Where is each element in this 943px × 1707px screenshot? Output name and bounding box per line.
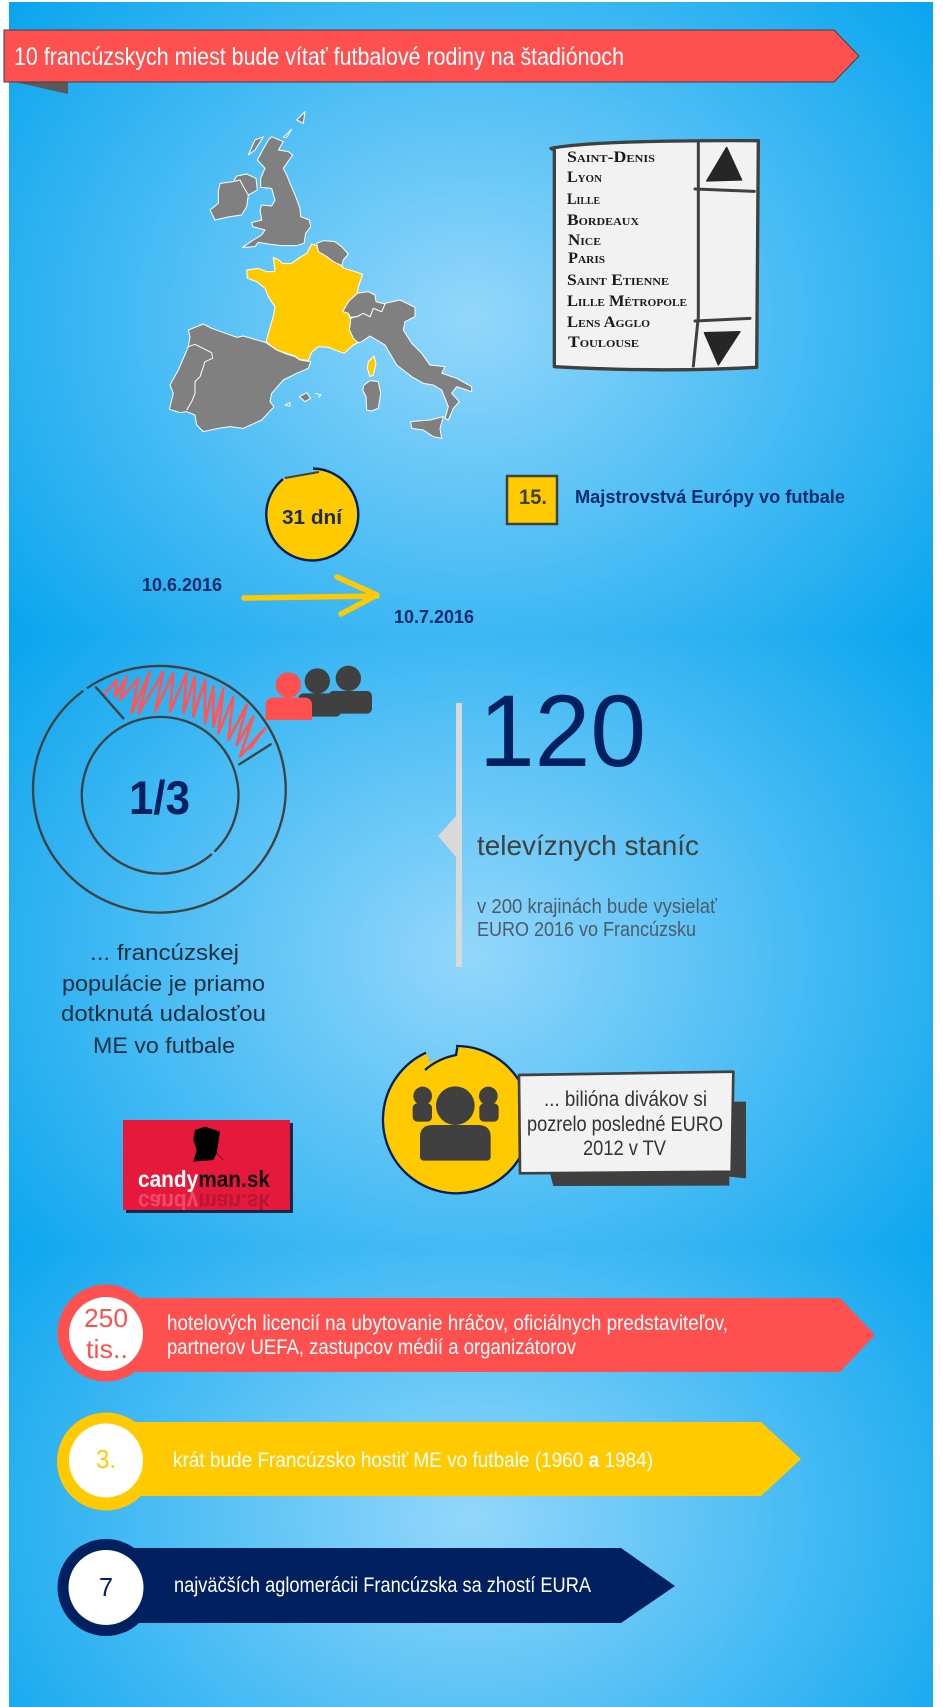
bar: hotel licences: partnerov UEFA, zastupcov médií a organizátorov <box>167 1336 576 1359</box>
viewers callout <box>519 1072 746 1186</box>
logo: candyman.sk: candyman.sk <box>138 1166 270 1192</box>
edition badge <box>507 476 557 524</box>
stat description <box>477 896 717 941</box>
text: population: ME vo futbale <box>93 1033 235 1058</box>
host city list box: Lille Métropole <box>567 293 687 310</box>
text: population: ... francúzskej <box>90 940 239 965</box>
bar: hosted three times <box>57 1412 801 1510</box>
host city list box: Saint Etienne <box>567 272 669 289</box>
bar: hosted three times: 3. <box>96 1444 116 1474</box>
text: population <box>61 940 266 1058</box>
bar: seven agglomerations: 7 <box>99 1572 113 1602</box>
bar: hotel licences: hotelových licencií na ubytovanie hráčov, oficiálnych predstaviteľov, <box>167 1312 728 1335</box>
donut chart: one third <box>33 666 286 913</box>
map of western Europe <box>169 112 472 438</box>
divider with pointer <box>438 703 462 967</box>
stat label: televíznych staníc <box>477 830 699 861</box>
bar: hotel licences: tis.. <box>86 1334 128 1364</box>
arrow: date range <box>244 577 377 614</box>
bar: hotel licences <box>58 1284 875 1382</box>
title banner <box>4 30 859 94</box>
host city list box: Lille <box>567 191 600 208</box>
stat description: v 200 krajinách bude vysielať <box>477 896 717 918</box>
edition text: Majstrovstvá Európy vo futbale <box>575 487 845 507</box>
icon: people <box>266 666 372 720</box>
bar: seven agglomerations <box>58 1539 675 1636</box>
viewers callout: ... bilióna divákov si <box>544 1088 707 1111</box>
title banner: 10 francúzskych miest bude vítať futbalové rodiny na štadiónoch <box>14 43 624 71</box>
viewers callout: pozrelo posledné EURO <box>527 1113 723 1136</box>
host city list box <box>551 141 758 370</box>
logo: candyman.sk: candyman.sk <box>138 1189 270 1215</box>
viewers circle icon <box>383 1046 531 1193</box>
stat description: EURO 2016 vo Francúzsku <box>477 919 696 941</box>
logo: candyman.sk <box>123 1120 293 1215</box>
host city list box: Lens Agglo <box>567 314 650 331</box>
end date: 10.7.2016 <box>394 607 474 627</box>
host city list box: Bordeaux <box>567 212 639 229</box>
duration circle <box>266 468 358 560</box>
panel: middle background <box>9 634 933 1254</box>
text: population: dotknutá udalosťou <box>61 1001 266 1026</box>
host city list box: Toulouse <box>568 334 639 351</box>
host city list box: Lyon <box>567 169 602 186</box>
panel: top background <box>9 2 933 634</box>
viewers callout: 2012 v TV <box>583 1137 666 1160</box>
bar: hotel licences: 250 <box>84 1303 128 1333</box>
stat: 120: 120 <box>479 674 646 788</box>
host city list box: Paris <box>568 250 605 267</box>
text: population: populácie je priamo <box>62 971 265 996</box>
panel: bottom background <box>9 1250 933 1707</box>
duration circle: 31 dní <box>282 507 343 529</box>
bar: seven agglomerations: najväčších aglomerácii Francúzska sa zhostí EURA <box>174 1574 591 1597</box>
start date: 10.6.2016 <box>142 575 222 595</box>
host city list box: Saint-Denis <box>567 149 655 166</box>
bar: hosted three times: krát bude Francúzsko hostiť ME vo futbale (1960 a 1984) <box>173 1449 653 1472</box>
donut chart: one third: 1/3 <box>129 771 190 824</box>
edition badge: 15. <box>519 486 547 509</box>
host city list box: Nice <box>568 232 601 249</box>
